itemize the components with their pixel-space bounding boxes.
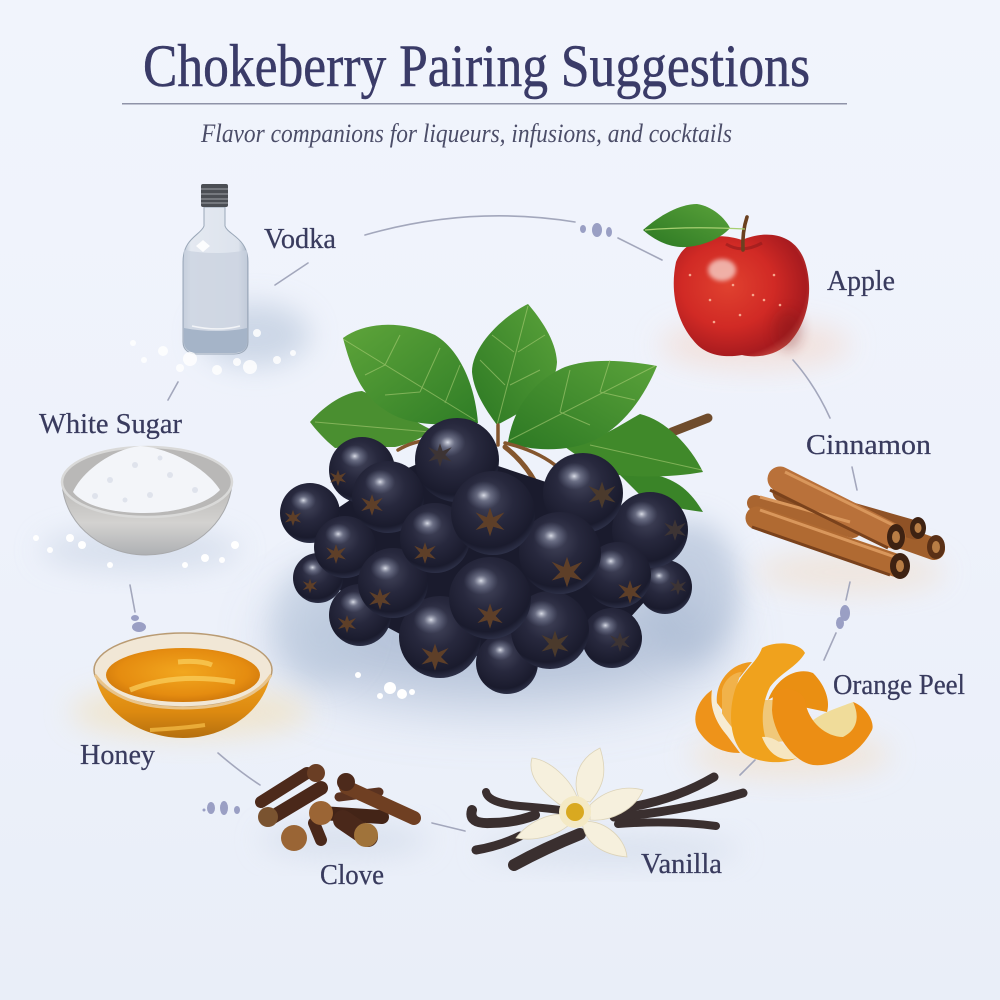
- title rule: [122, 103, 847, 104]
- sugar specks under cluster: [355, 672, 415, 699]
- calyx stars: [285, 443, 686, 670]
- icon: cloves: [258, 764, 414, 851]
- icon: vanilla: [471, 748, 743, 865]
- icon: cinnamon sticks: [752, 472, 945, 579]
- leaves: [310, 304, 703, 512]
- connector lines: [130, 216, 857, 831]
- title: Chokeberry Pairing Suggestions: [143, 33, 810, 99]
- icon: apple: [643, 204, 809, 356]
- icon: honey bowl: [94, 633, 272, 738]
- sugar crystals near vodka: [130, 329, 296, 375]
- label: Vanilla: Vanilla: [641, 849, 723, 880]
- sugar crystals near bowl: [33, 534, 239, 568]
- label: Vodka: Vodka: [264, 224, 337, 255]
- berries, back to front: [280, 418, 692, 694]
- label: Honey: Honey: [80, 740, 155, 771]
- connector dots: [131, 223, 850, 815]
- label: Orange Peel: Orange Peel: [833, 670, 965, 701]
- label: White Sugar: White Sugar: [39, 409, 183, 440]
- label: Apple: Apple: [827, 266, 895, 297]
- icon: sugar bowl: [62, 446, 232, 555]
- branch: [672, 418, 708, 432]
- stems: [398, 425, 555, 512]
- label: Cinnamon: Cinnamon: [806, 430, 931, 461]
- label: Clove: Clove: [320, 860, 384, 891]
- central chokeberry cluster: [280, 304, 708, 699]
- icon: vodka bottle: [183, 184, 248, 354]
- subtitle: Flavor companions for liqueurs, infusions, and cocktails: [200, 119, 732, 148]
- icon: orange peel: [695, 643, 873, 765]
